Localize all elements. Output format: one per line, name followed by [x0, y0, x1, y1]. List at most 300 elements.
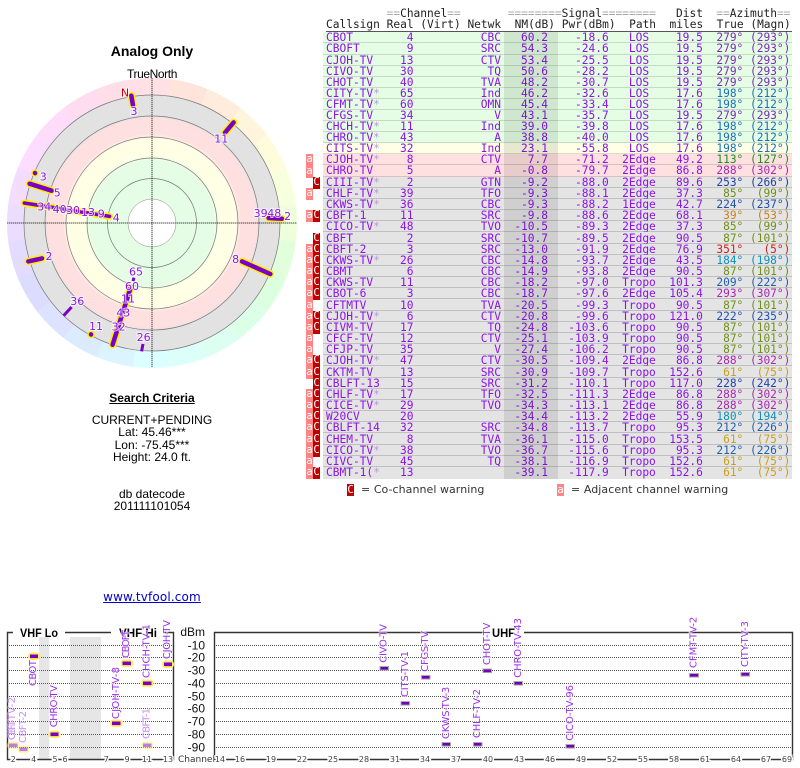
UHF station names: CICO-TV-96	[565, 685, 576, 741]
row CBFT-1: 2Edge	[622, 209, 656, 222]
row CFCF-TV: 90.5	[676, 332, 703, 345]
warning badges: a	[306, 444, 313, 456]
row CBOT-6: 105.4	[669, 287, 703, 300]
warning badges: a	[306, 310, 313, 322]
station labels: 30	[66, 204, 80, 217]
UHF station names: CIVO-TV	[378, 624, 390, 663]
row CIVM-TV: 87°	[723, 321, 743, 334]
VHF panel: 6	[62, 755, 68, 764]
row CFGS-TV: CFGS-TV	[326, 109, 373, 122]
station labels: 32	[111, 321, 125, 334]
row CBFT-2: 76.9	[676, 243, 703, 256]
UHF panel: 28	[359, 755, 369, 764]
dBm axis labels: -70	[188, 714, 205, 728]
row CBLFT-13: CBLFT-13	[326, 377, 380, 390]
row CKWS-TV 26	[323, 255, 792, 266]
row CIII-TV: -9.2	[521, 176, 548, 189]
warning badges: a	[306, 399, 313, 411]
warning badges: C	[313, 388, 320, 400]
row CBMT-1: 13	[400, 466, 414, 479]
row CJOH-TV: 53.4	[521, 54, 548, 67]
row CITS-TV: 17.6	[676, 142, 703, 155]
legend: co-channel: C	[347, 484, 354, 496]
row CBLFT-14: (226°)	[750, 421, 790, 434]
row CBMT: 6	[407, 265, 414, 278]
row CITY-TV: (212°)	[750, 87, 790, 100]
row CJOH-TV: CJOH-TV	[326, 54, 373, 67]
row CHRO-TV 5: 5	[407, 164, 414, 177]
row CBLFT-14: 95.3	[676, 421, 703, 434]
row CJOH-TV 6: 222°	[716, 310, 743, 323]
row CHEM-TV: 61°	[723, 433, 743, 446]
row CHOT-TV: 19.5	[676, 76, 703, 89]
row CHRO-TV 43: A	[494, 131, 501, 144]
row CITY-TV: Ind	[481, 87, 501, 100]
station labels: 3	[130, 105, 137, 118]
row CICO-TV 38: (226°)	[750, 444, 790, 457]
row CHLF-TV 39: TFO	[481, 187, 501, 200]
row CHLF-TV 39: -9.3	[521, 187, 548, 200]
row CBFT-1: -88.6	[575, 209, 609, 222]
row CJOH-TV 8: 2Edge	[622, 153, 656, 166]
row CBOT-6: 3	[407, 287, 414, 300]
row CIVO-TV: 30	[400, 65, 414, 78]
row CIVM-TV	[323, 322, 792, 333]
row CICO-TV 38: 212°	[716, 444, 743, 457]
dBm axis labels: -30	[188, 664, 205, 678]
row CJOH-TV: 279°	[716, 54, 743, 67]
warning badges: C	[313, 444, 320, 456]
warning badges: a	[306, 265, 313, 277]
station labels: 2	[45, 250, 52, 263]
row CJOH-TV 47: CJOH-TV*	[326, 354, 380, 367]
row CHRO-TV 43: CHRO-TV*	[326, 131, 380, 144]
row CBFT-1: (53°)	[757, 209, 790, 222]
warning badges: a	[306, 332, 313, 344]
VHF station names: CHCH-TV-1	[142, 624, 152, 678]
row CHRO-TV 43: 43	[400, 131, 414, 144]
row CBFT: 90.5	[676, 232, 703, 245]
row W20CV	[323, 411, 792, 422]
row CHEM-TV: TVA	[481, 433, 501, 446]
row CJOH-TV 47: -30.5	[514, 354, 548, 367]
row CHRO-TV 5: 86.8	[676, 164, 703, 177]
row CJOH-TV: -25.5	[575, 54, 609, 67]
UHF panel	[214, 617, 792, 764]
row CBLFT-14: SRC	[481, 421, 501, 434]
row CIVO-TV: (293°)	[750, 65, 790, 78]
UHF panel: 31	[390, 755, 400, 764]
warning badges: a	[306, 343, 313, 355]
row CBOFT: 19.5	[676, 42, 703, 55]
row CITS-TV: Ind	[481, 142, 501, 155]
row CBLFT-13: -31.2	[514, 377, 548, 390]
row CFTMTV: Tropo	[622, 299, 656, 312]
row CBMT-1: 152.6	[669, 466, 703, 479]
row CICO-TV 48: 2Edge	[622, 220, 656, 233]
row CBOT-6: -97.6	[575, 287, 609, 300]
row CBLFT-13: 117.0	[669, 377, 703, 390]
row CBFT-2: 3	[407, 243, 414, 256]
row W20CV: 2Edge	[622, 410, 656, 423]
row CICO-TV 48: 37.3	[676, 220, 703, 233]
row W20CV: -113.2	[568, 410, 609, 423]
title: Analog Only	[111, 43, 193, 59]
VHF station names: CIII-TV-2	[7, 697, 18, 740]
row CBOT: CBOT	[326, 31, 353, 44]
row CHLF-TV 39: 39	[400, 187, 414, 200]
station labels: 26	[136, 331, 150, 344]
row CFCF-TV: CTV	[481, 332, 501, 345]
row CJOH-TV 6: CTV	[481, 310, 501, 323]
warning badges: C	[313, 377, 320, 389]
dBm axis labels: -50	[188, 690, 205, 704]
station labels: 5	[53, 187, 60, 200]
VHF station names: CHRO-TV	[49, 685, 60, 727]
row CFJP-TV: -27.4	[514, 343, 548, 356]
row CHOT-TV: TVA	[481, 76, 501, 89]
row CBOFT: 9	[407, 42, 414, 55]
row CJOH-TV 8	[323, 154, 792, 165]
table header: Dist	[676, 7, 703, 20]
row CBFT-1: 68.1	[676, 209, 703, 222]
row CHRO-TV 5: 2Edge	[622, 164, 656, 177]
row CFGS-TV: (293°)	[750, 109, 790, 122]
row CHLF-TV 17: 2Edge	[622, 388, 656, 401]
row CBFT: -89.5	[575, 232, 609, 245]
row CHRO-TV 5: 288°	[716, 164, 743, 177]
row CFGS-TV: V	[494, 109, 501, 122]
row CHCH-TV: 17.6	[676, 120, 703, 133]
row CHEM-TV: Tropo	[622, 433, 656, 446]
row CHOT-TV: 40	[400, 76, 414, 89]
row CHRO-TV 43: 38.8	[521, 131, 548, 144]
row CHCH-TV: (212°)	[750, 120, 790, 133]
row CIVM-TV: -103.6	[568, 321, 609, 334]
row CICO-TV 48: -89.3	[575, 220, 609, 233]
row CBFT: CBFT	[326, 232, 353, 245]
row CFGS-TV: 34	[400, 109, 414, 122]
row CKWS-TV 36: 42.7	[676, 198, 703, 211]
VHF panel: VHF Hi	[119, 626, 157, 640]
row CBFT-2: 2Edge	[622, 243, 656, 256]
row CICO-TV 48: 85°	[723, 220, 743, 233]
row CFTMTV: 87°	[723, 299, 743, 312]
dBm axis labels: dBm	[180, 625, 205, 639]
UHF panel: 69	[782, 755, 792, 764]
row CHLF-TV 17: 288°	[716, 388, 743, 401]
row CJOH-TV 6: 6	[407, 310, 414, 323]
row CJOH-TV	[323, 55, 792, 66]
station labels: 13	[81, 206, 95, 219]
row CFGS-TV: 19.5	[676, 109, 703, 122]
warning badges: a	[306, 243, 313, 255]
legend: adjacent: = Adjacent channel warning	[571, 483, 728, 496]
VHF station names: CBOFT	[121, 629, 132, 658]
row CIVC-TV: Tropo	[622, 455, 656, 468]
row CJOH-TV: (293°)	[750, 54, 790, 67]
row CJOH-TV 47: 47	[400, 354, 414, 367]
row CBLFT-13	[323, 378, 792, 389]
row CJOH-TV 6: CJOH-TV*	[326, 310, 380, 323]
row CHLF-TV 17: TFO	[481, 388, 501, 401]
row CJOH-TV 6: 121.0	[669, 310, 703, 323]
row CITY-TV: -32.6	[575, 87, 609, 100]
row CICO-TV 38: -36.7	[514, 444, 548, 457]
signal margin column highlight	[504, 32, 558, 479]
VHF panel: VHF Lo	[20, 626, 58, 640]
station labels: 60	[125, 280, 139, 293]
row CHCH-TV: 11	[400, 120, 414, 133]
row CIVC-TV: TQ	[488, 455, 501, 468]
station labels: 8	[232, 253, 239, 266]
row CHEM-TV: 8	[407, 433, 414, 446]
row CFCF-TV: (101°)	[750, 332, 790, 345]
row CKTM-TV: 13	[400, 366, 414, 379]
row CBLFT-14: 212°	[716, 421, 743, 434]
row CIVC-TV: 61°	[723, 455, 743, 468]
row CHOT-TV: LOS	[629, 76, 649, 89]
row CHLF-TV 39: -88.1	[575, 187, 609, 200]
row CHRO-TV 5: -0.8	[521, 164, 548, 177]
row CBOFT: (293°)	[750, 42, 790, 55]
warning badges: C	[313, 176, 320, 188]
row CKWS-TV 36: 1Edge	[622, 198, 656, 211]
row CBOT: 279°	[716, 31, 743, 44]
row CJOH-TV: LOS	[629, 54, 649, 67]
row CBMT-1: Tropo	[622, 466, 656, 479]
row CFTMTV: TVA	[481, 299, 501, 312]
row CBOFT: -24.6	[575, 42, 609, 55]
row CFJP-TV: -106.2	[568, 343, 609, 356]
row W20CV: (194°)	[750, 410, 790, 423]
warning badges: a	[306, 276, 313, 288]
row CITS-TV	[323, 143, 792, 154]
row CJOH-TV: 19.5	[676, 54, 703, 67]
row CFMT-TV: LOS	[629, 98, 649, 111]
row CKWS-TV 36: 224°	[716, 198, 743, 211]
station labels: 11	[121, 293, 135, 306]
row CICE-TV: CICE-TV*	[326, 399, 380, 412]
row CIVM-TV: 90.5	[676, 321, 703, 334]
row CKWS-TV 26: (198°)	[750, 254, 790, 267]
warning badges: C	[313, 399, 320, 411]
row CBOT-6	[323, 288, 792, 299]
dBm axis labels: -60	[188, 702, 205, 716]
row CFTMTV: 10	[400, 299, 414, 312]
row CJOH-TV 8: CJOH-TV*	[326, 153, 380, 166]
row CBOFT: LOS	[629, 42, 649, 55]
row CFTMTV: CFTMTV	[326, 299, 366, 312]
row CBFT: 2	[407, 232, 414, 245]
row CBFT-2: -13.0	[514, 243, 548, 256]
row CBMT: CBC	[481, 265, 501, 278]
row CBLFT-13: (242°)	[750, 377, 790, 390]
UHF station names: CHOT-TV	[482, 623, 493, 665]
row CKWS-TV 11	[323, 277, 792, 288]
warning badges: a	[306, 466, 313, 478]
row CKWS-TV 36: CKWS-TV*	[326, 198, 380, 211]
row CKWS-TV 11: Tropo	[622, 276, 656, 289]
polar chart	[7, 78, 297, 368]
row CHLF-TV 17: 86.8	[676, 388, 703, 401]
row CICE-TV: 288°	[716, 399, 743, 412]
row CHOT-TV: 48.2	[521, 76, 548, 89]
VHF panel: 9	[124, 755, 130, 764]
row CHRO-TV 43	[323, 132, 792, 143]
row CBOT: CBC	[481, 31, 501, 44]
row CFCF-TV: -103.9	[568, 332, 609, 345]
row CIII-TV: CIII-TV*	[326, 176, 380, 189]
row CHLF-TV 39: 37.3	[676, 187, 703, 200]
row CFMT-TV: 45.4	[521, 98, 548, 111]
row CHLF-TV 39: (99°)	[757, 187, 790, 200]
row CHRO-TV 43: LOS	[629, 131, 649, 144]
warning badges: a	[306, 209, 313, 221]
row CICO-TV 38	[323, 445, 792, 456]
row CIII-TV: GTN	[481, 176, 501, 189]
station labels	[37, 87, 291, 344]
row CBMT-1	[323, 467, 792, 479]
row CKWS-TV 36: -88.2	[575, 198, 609, 211]
row CBFT: (101°)	[750, 232, 790, 245]
UHF station names	[378, 617, 751, 741]
row CBLFT-14: Tropo	[622, 421, 656, 434]
row CHCH-TV: -39.8	[575, 120, 609, 133]
db datecode: db datecode 201111101054	[114, 487, 190, 513]
row CBMT: (101°)	[750, 265, 790, 278]
row CIVC-TV: -116.9	[568, 455, 609, 468]
warning badges: C	[313, 433, 320, 445]
VHF station names: CJOH-TV	[162, 620, 173, 659]
row CHEM-TV: CHEM-TV	[326, 433, 373, 446]
row CBFT-1	[323, 210, 792, 221]
row CHLF-TV 17: 17	[400, 388, 414, 401]
row CKWS-TV 11: 11	[400, 276, 414, 289]
row CHRO-TV 5: CHRO-TV	[326, 164, 373, 177]
row CFMT-TV: 198°	[716, 98, 743, 111]
row CICO-TV 48: -10.5	[514, 220, 548, 233]
VHF station names: CJOH-TV-8	[111, 667, 122, 719]
row CITS-TV: 198°	[716, 142, 743, 155]
UHF panel: 58	[669, 755, 679, 764]
row CHLF-TV 39	[323, 188, 792, 199]
table header: Callsign Real (Virt) Netwk NM(dB) Pwr(dBm) Path miles True (Magn)	[326, 18, 791, 31]
UHF station markers	[380, 666, 750, 748]
UHF panel: 40	[483, 755, 493, 764]
row CBFT-1: -9.8	[521, 209, 548, 222]
row CBLFT-13: 15	[400, 377, 414, 390]
row CHRO-TV 43: 198°	[716, 131, 743, 144]
warning badges: C	[313, 466, 320, 478]
row CHLF-TV 39: 85°	[723, 187, 743, 200]
VHF panel	[7, 620, 174, 764]
row CKTM-TV: SRC	[481, 366, 501, 379]
row W20CV: 20	[400, 410, 414, 423]
row CHOT-TV: (293°)	[750, 76, 790, 89]
row CFJP-TV: Tropo	[622, 343, 656, 356]
row CFJP-TV: CFJP-TV	[326, 343, 373, 356]
UHF panel: 22	[297, 755, 307, 764]
row CIII-TV: -88.0	[575, 176, 609, 189]
row CKWS-TV 11: 209°	[716, 276, 743, 289]
row CBOT: 4	[407, 31, 414, 44]
row CITS-TV: (212°)	[750, 142, 790, 155]
row CKWS-TV 36: (237°)	[750, 198, 790, 211]
row CICO-TV 48: 48	[400, 220, 414, 233]
warning badges: C	[313, 354, 320, 366]
row CICO-TV 48: CICO-TV*	[326, 220, 380, 233]
warning badges: a	[306, 287, 313, 299]
row CKWS-TV 11: -18.2	[514, 276, 548, 289]
row CHOT-TV: -30.7	[575, 76, 609, 89]
warning badges: a	[306, 299, 313, 311]
row CFTMTV: 90.5	[676, 299, 703, 312]
row CFTMTV: -20.5	[514, 299, 548, 312]
row CITY-TV: 198°	[716, 87, 743, 100]
warning badges: C	[313, 321, 320, 333]
row CBOT: 19.5	[676, 31, 703, 44]
row CHLF-TV 17	[323, 389, 792, 400]
VHF panel: 2	[11, 755, 16, 764]
row CKWS-TV 26: 26	[400, 254, 414, 267]
row CKTM-TV: -109.7	[568, 366, 609, 379]
station labels: 36	[70, 295, 84, 308]
row CHLF-TV 17: -32.5	[514, 388, 548, 401]
row CBFT-1: CBFT-1	[326, 209, 366, 222]
row CKWS-TV 36: 36	[400, 198, 414, 211]
station labels: 40	[52, 203, 66, 216]
row CIVO-TV: 279°	[716, 65, 743, 78]
row CBMT-1: -117.9	[568, 466, 609, 479]
row CIVM-TV: -24.8	[514, 321, 548, 334]
warning badges: C	[313, 232, 320, 244]
table header: ========Signal========	[508, 7, 656, 20]
warning badges: C	[313, 310, 320, 322]
VHF station markers	[28, 652, 174, 738]
row CKTM-TV: 61°	[723, 366, 743, 379]
row CBOT: (293°)	[750, 31, 790, 44]
row CICO-TV 38: Tropo	[622, 444, 656, 457]
row CHRO-TV 43: 17.6	[676, 131, 703, 144]
UHF panel: 52	[607, 755, 617, 764]
row CHRO-TV 5: (302°)	[750, 164, 790, 177]
row CFCF-TV: 12	[400, 332, 414, 345]
row CITY-TV: 17.6	[676, 87, 703, 100]
row CIVM-TV: CIVM-TV	[326, 321, 373, 334]
VHF station names	[7, 620, 173, 743]
row CBOT-6: 293°	[716, 287, 743, 300]
row CFMT-TV: OMN	[481, 98, 501, 111]
station labels: 2	[284, 210, 291, 223]
row CKWS-TV 26: 2Edge	[622, 254, 656, 267]
row CHCH-TV: 39.0	[521, 120, 548, 133]
station labels: 39	[253, 207, 267, 220]
row CJOH-TV 47: 86.8	[676, 354, 703, 367]
VHF station names: CBFT-2	[18, 711, 29, 743]
row CIII-TV	[323, 177, 792, 188]
true north label: TrueNorth	[127, 67, 177, 81]
row CBFT-1: 39°	[723, 209, 743, 222]
row CJOH-TV 6	[323, 311, 792, 322]
station labels: 9	[97, 208, 104, 221]
row W20CV: W20CV	[326, 410, 360, 423]
row CIII-TV: 253°	[716, 176, 743, 189]
criteria text: CURRENT+PENDING Lat: 45.46*** Lon: -75.45*** Height: 24.0 ft.	[92, 413, 212, 464]
row CKTM-TV: CKTM-TV	[326, 366, 373, 379]
row CKWS-TV 26: CKWS-TV*	[326, 254, 380, 267]
UHF panel: 43	[514, 755, 524, 764]
